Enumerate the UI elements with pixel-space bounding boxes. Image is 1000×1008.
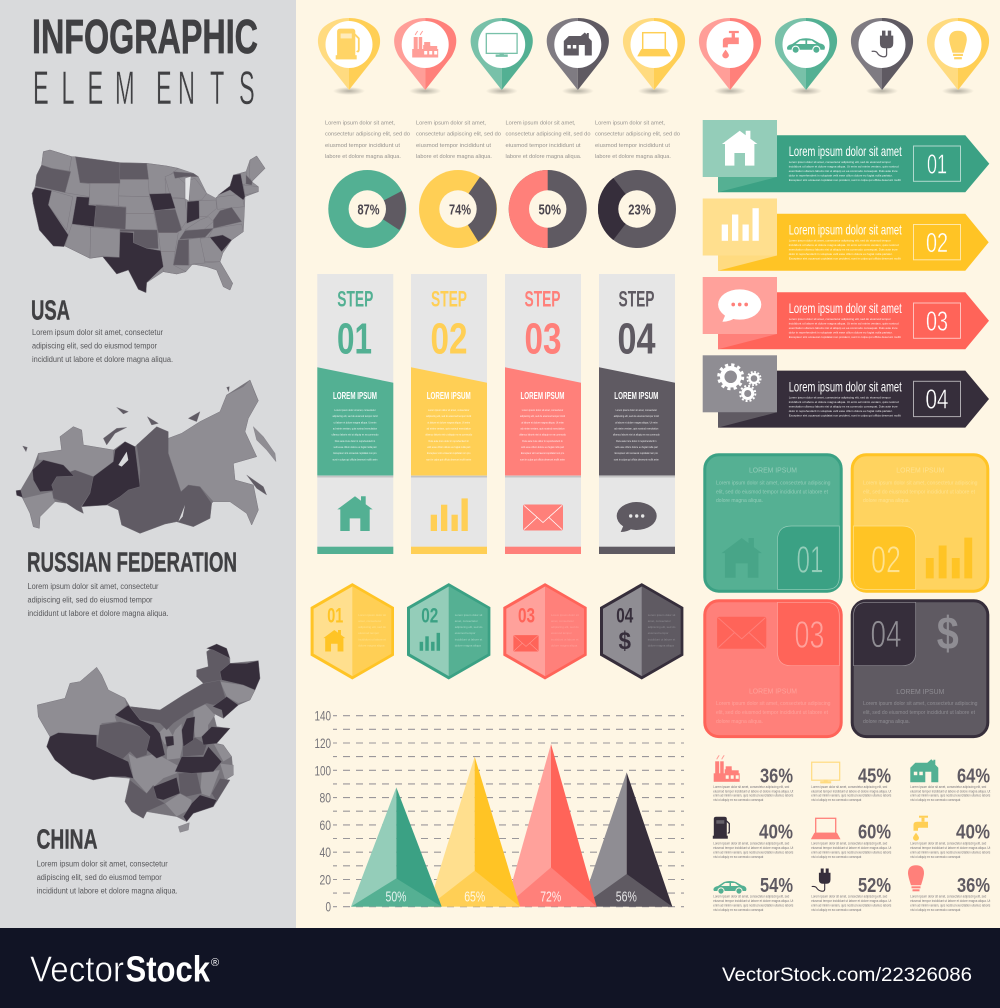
banner 03 [703,277,989,349]
banner 04: Lorem ipsum dolor sit amet, consectetur adipiscing elit, sed do eiusmod tempor [789,395,891,399]
banner 04: Excepteur sint occaecat cupidatat non proident, sunt in culpa qui officia deserunt mollit [789,413,901,417]
pin: plug [851,18,913,95]
pin: car [775,18,837,95]
stat: car 54%: nisi ut aliquip ex ea commodo consequat [713,908,763,912]
step card 02 [411,274,487,554]
banner 04: incididunt ut labore et dolore magna aliqua. Ut enim ad minim veniam, quis nostrud [789,400,899,404]
tile 04 [852,601,988,737]
text block: China description: adipiscing elit, sed do eiusmod tempor [37,873,162,882]
title [32,11,258,114]
tile 01: Lorem ipsum dolor sit amet, consectetur adipiscing [716,480,831,486]
stat: bulb 36%: enim ad minim veniam, quis nostrud exercitation ullamco laboris [910,903,991,907]
step card 03: adipiscing elit, sed do eiusmod tempor incid [520,415,566,418]
heading: Russian Federation: RUSSIAN FEDERATION [27,546,237,578]
tile 01: LOREM IPSUM [749,468,797,475]
tile 04: $ [937,607,959,659]
hexagon 04: $ [618,627,631,655]
text blocks above donuts: eiusmod tempor incididunt ut [595,143,670,149]
stat: fuel 40%: enim ad minim veniam, quis nostrud exercitation ullamco laboris [713,850,794,854]
text block: Russia description [28,582,168,618]
banner 02: Lorem ipsum dolor sit amet [789,222,902,238]
text block: Russia description: incididunt ut labore et dolore magna aliqua. [28,609,168,618]
tile 02: LOREM IPSUM [896,468,944,475]
chart axis labels: 20 [320,872,331,888]
stat: monitor 45%: 45% [858,765,891,787]
hexagon 04: eiusmod tempor [648,631,668,635]
stat: bulb 36%: nisi ut aliquip ex ea commodo consequat [910,908,960,912]
banner 01: Excepteur sint occaecat cupidatat non proident, sunt in culpa qui officia deserunt mollit [789,178,901,182]
pin row [318,18,989,95]
step card 02: Lorem ipsum dolor sit amet, consectetur [428,409,470,412]
text block: Russia description: Lorem ipsum dolor sit amet, consectetur [28,582,159,591]
pyramid: 56% [581,772,672,907]
tile 03: LOREM IPSUM [749,688,797,696]
banner 03: Excepteur sint occaecat cupidatat non proident, sunt in culpa qui officia deserunt mollit [789,335,901,339]
heading: China: CHINA [36,824,98,854]
text blocks above donuts: labore et dolore magna aliqua. [506,154,582,160]
hexagon 02: eiusmod tempor [455,631,475,635]
hexagon 01: eiusmod tempor [358,631,379,635]
step card 02: ut labore et dolore magna aliqua. Ut enim [427,421,470,424]
hexagon 02: amet, consectetur [455,619,478,623]
step card 04: ut labore et dolore magna aliqua. Ut enim [615,421,658,424]
tile 03: 03 [794,614,824,656]
donut chart: 50%: 50% [538,202,561,218]
hexagon 03 [505,585,585,678]
tile 01: elit, sed do eiusmod tempor incididunt ut labore et [716,489,828,495]
step card 02: Duis aute irure dolor in reprehenderit in [429,440,470,443]
stat: bulb 36%: 36% [957,875,990,897]
step card 01: STEP [337,287,373,312]
chart axis labels: 60 [320,817,331,833]
title: ELEMENTS [33,61,255,114]
step card 04: ad minim veniam, quis nostrud exercitation [614,428,659,430]
stat: bulb 36%: eiusmod tempor incididunt ut labore et dolore magna aliqua. Ut [910,899,990,903]
tile 02 [852,455,988,591]
stat: monitor 45%: enim ad minim veniam, quis nostrud exercitation ullamco laboris [811,794,892,798]
step card 01: ullamco laboris nisi ut aliquip ex ea commodo [332,434,379,437]
tile 03: Lorem ipsum dolor sit amet, consectetur adipiscing [716,701,831,707]
hexagon 01: adipiscing elit, sed do [358,625,386,629]
map: USA [32,150,265,293]
hexagon 04: amet, consectetur [648,619,671,623]
step card 04 [599,274,675,554]
step card 04: Duis aute irure dolor in reprehenderit in [616,440,657,443]
step card 03: velit esse cillum dolore eu fugiat nulla pari [521,446,565,449]
stat: laptop 60%: 60% [858,822,891,844]
stat: factory 36% [713,755,794,802]
text block: China description: Lorem ipsum dolor sit amet, consectetur [37,860,168,868]
footer bar [0,928,1000,1008]
chart axis labels: 0 [326,899,331,915]
footer bar: Stock [126,949,211,990]
text block: USA description [32,328,173,364]
banner 03: 03 [926,305,948,336]
hexagon 02: 02 [421,604,438,627]
banner 04: dolor in reprehenderit in voluptate velit esse cillum dolore eu fugiat nulla pariatur. [789,409,893,413]
stat: factory 36%: Lorem ipsum dolor sit amet, consectetur adipiscing elit, sed [713,785,790,789]
stat: bulb 36% [908,865,991,912]
map: Russian Federation [16,380,276,533]
chart axis labels: 120 [314,735,331,751]
footer bar: ® [211,957,219,969]
hexagon 03: 03 [518,604,535,627]
hexagon 03: amet, consectetur [551,619,574,623]
text blocks above donuts: eiusmod tempor incididunt ut [506,143,581,149]
banner 01: Lorem ipsum dolor sit amet, consectetur adipiscing elit, sed do eiusmod tempor [789,160,891,164]
pyramid value labels: 50% [386,890,407,906]
pyramid value labels: 72% [540,890,561,906]
banner 02: Lorem ipsum dolor sit amet, consectetur adipiscing elit, sed do eiusmod tempor [789,238,891,242]
pin: bulb [927,18,989,95]
step card 03: Duis aute irure dolor in reprehenderit in [522,440,563,443]
hexagon 04: dolore magna aliqua [648,643,674,647]
step card 02: ad minim veniam, quis nostrud exercitation [427,428,471,430]
stat: plug 52%: nisi ut aliquip ex ea commodo consequat [811,908,861,912]
stat: tap 40%: eiusmod tempor incididunt ut labore et dolore magna aliqua. Ut [910,846,990,850]
stat: plug 52% [811,869,892,912]
chart axis labels: 100 [314,762,331,778]
banner 03: dolor in reprehenderit in voluptate velit esse cillum dolore eu fugiat nulla pariatur. [789,330,893,334]
footer bar: VectorStock.com/22326086 [722,964,972,986]
step card 03: ad minim veniam, quis nostrud exercitation [520,428,565,430]
footer bar: Vector [30,949,124,990]
step card 04: ullamco laboris nisi ut aliquip ex ea commodo [613,434,660,437]
tile 03: elit, sed do eiusmod tempor incididunt ut labore et [716,710,828,716]
step card 03: STEP [524,287,560,312]
hexagon 03: incididunt ut labore et [551,637,579,641]
tile 04: LOREM IPSUM [896,689,944,696]
step card 04: Excepteur sint occaecat cupidatat non pro [615,452,659,455]
text blocks above donuts: consectetur adipiscing elit, sed do [325,132,410,138]
pyramid chart [314,708,684,915]
stat: car 54%: Lorem ipsum dolor sit amet, consectetur adipiscing elit, sed [713,895,790,899]
text block: Russia description: adipiscing elit, sed do eiusmod tempor [28,596,153,604]
step card 01: ad minim veniam, quis nostrud exercitation [333,428,378,430]
stat: plug 52%: eiusmod tempor incididunt ut labore et dolore magna aliqua. Ut [811,899,891,903]
stat: factory 36%: 36% [760,765,793,787]
step card 03: LOREM IPSUM [520,391,564,402]
banner 02: dolor in reprehenderit in voluptate velit esse cillum dolore eu fugiat nulla pariatur. [789,252,893,256]
step card 01: ut labore et dolore magna aliqua. Ut enim [334,421,376,424]
donut chart: 23%: 23% [628,202,651,218]
text blocks above donuts: consectetur adipiscing elit, sed do [506,132,590,138]
stat: factory 36%: nisi ut aliquip ex ea commodo consequat [713,798,763,802]
hexagon 04: Lorem ipsum dolor sit [648,613,676,617]
hexagon 02: dolore magna aliqua [455,643,481,647]
banner 04: Lorem ipsum dolor sit amet [789,378,902,394]
stat: plug 52%: Lorem ipsum dolor sit amet, consectetur adipiscing elit, sed [811,895,888,899]
hexagon 02 [408,585,489,678]
tile 02: 02 [871,540,901,582]
pyramid: 50% [351,787,442,907]
stat: fuel 40%: eiusmod tempor incididunt ut labore et dolore magna aliqua. Ut [713,846,793,850]
hexagon 03: dolore magna aliqua [551,643,578,647]
map: China [37,644,260,832]
stat: fuel 40% [713,817,794,859]
chart axis labels: 40 [320,844,331,860]
tile 04: elit, sed do eiusmod tempor incididunt ut labore et [863,710,975,716]
tile 03 [705,601,841,737]
pin: laptop [623,18,685,95]
step card 02: Excepteur sint occaecat cupidatat non pro [427,452,471,455]
hexagon 04: 04 [616,604,633,627]
text blocks above donuts: labore et dolore magna aliqua. [325,154,401,160]
stat: house 64% [910,759,991,802]
stat: house 64%: eiusmod tempor incididunt ut labore et dolore magna aliqua. Ut [910,789,990,793]
text blocks above donuts: Lorem ipsum dolor sit amet, [325,120,395,126]
banner 01: Lorem ipsum dolor sit amet [789,143,902,159]
tile 01: 01 [796,540,824,582]
banner 02 [703,198,989,271]
hexagon 01 [312,585,392,678]
hexagon 01: Lorem ipsum dolor sit [358,613,386,617]
text blocks above donuts: Lorem ipsum dolor sit amet, [506,120,576,126]
banner 01: dolor in reprehenderit in voluptate velit esse cillum dolore eu fugiat nulla pariatur. [789,174,893,178]
hexagon 03: eiusmod tempor [551,631,572,635]
step card 03: sunt in culpa qui officia deserunt mollit anim [520,458,565,461]
stat: car 54%: enim ad minim veniam, quis nostrud exercitation ullamco laboris [713,903,794,907]
step card 01: sunt in culpa qui officia deserunt mollit anim [332,458,378,461]
text block: China description [37,860,178,896]
tile 02: Lorem ipsum dolor sit amet, consectetur adipiscing [863,480,978,486]
chart axis labels: 140 [314,708,331,724]
banner 03: Lorem ipsum dolor sit amet, consectetur adipiscing elit, sed do eiusmod tempor [789,317,891,321]
step card 02: adipiscing elit, sed do eiusmod tempor incid [426,415,472,418]
step card 03: ullamco laboris nisi ut aliquip ex ea commodo [519,434,567,437]
donut chart: 23% [598,170,676,248]
stat: monitor 45%: Lorem ipsum dolor sit amet, consectetur adipiscing elit, sed [811,785,888,789]
text block: USA description: adipiscing elit, sed do eiusmod tempor [32,342,157,350]
stat: bulb 36%: Lorem ipsum dolor sit amet, consectetur adipiscing elit, sed [910,895,987,899]
text blocks above donuts: eiusmod tempor incididunt ut [325,143,400,149]
banner 04: exercitation ullamco laboris nisi ut aliquip ex ea commodo consequat. Duis aute irure [789,404,898,408]
text block: China description: incididunt ut labore et dolore magna aliqua. [37,886,178,896]
stat: tap 40%: 40% [956,822,990,844]
tile 02: dolore magna aliqua. [863,498,910,504]
step card 01: LOREM IPSUM [333,391,377,402]
hexagon 01: 01 [327,604,344,627]
step card 01: velit esse cillum dolore eu fugiat nulla pari [333,446,377,449]
step card 04: sunt in culpa qui officia deserunt mollit anim [614,458,659,461]
pyramid: 72% [505,744,597,907]
stat: tap 40%: enim ad minim veniam, quis nostrud exercitation ullamco laboris [910,850,991,854]
stat: fuel 40%: Lorem ipsum dolor sit amet, consectetur adipiscing elit, sed [713,842,790,846]
step card 04: 04 [618,314,656,363]
step card 02: 02 [430,314,468,363]
donut chart: 87%: 87% [358,202,380,218]
pyramid value labels: 65% [464,890,485,906]
banner 02: incididunt ut labore et dolore magna aliqua. Ut enim ad minim veniam, quis nostrud [789,243,899,247]
text blocks above donuts [325,120,680,160]
stat: laptop 60%: enim ad minim veniam, quis nostrud exercitation ullamco laboris [811,850,892,854]
pyramid value labels [386,890,637,906]
hexagon 04: incididunt ut labore et [648,637,675,641]
stat: car 54% [713,875,794,912]
banner 02: Excepteur sint occaecat cupidatat non proident, sunt in culpa qui officia deserunt mollit [789,256,901,260]
stat: plug 52%: 52% [858,875,891,897]
text blocks above donuts: consectetur adipiscing elit, sed do [595,132,680,138]
step card 04: adipiscing elit, sed do eiusmod tempor incid [614,415,660,418]
banner 04 [703,355,989,428]
step card 04: STEP [618,287,654,312]
step card 02: STEP [431,287,467,312]
step card 03: 03 [524,314,562,363]
donut chart: 50% [509,170,587,248]
tile 03: dolore magna aliqua. [716,719,763,725]
hexagon 02: adipiscing elit, sed do [455,625,483,629]
chart axis labels: 80 [320,790,331,806]
hexagon 04: adipiscing elit, sed do [648,625,676,629]
step card 02: sunt in culpa qui officia deserunt mollit anim [426,458,471,461]
pin: tap [699,18,761,95]
stat: fuel 40%: 40% [759,822,793,844]
hexagon 03: adipiscing elit, sed do [551,625,579,629]
stat: monitor 45%: eiusmod tempor incididunt ut labore et dolore magna aliqua. Ut [811,789,891,793]
stat: laptop 60%: nisi ut aliquip ex ea commodo consequat [811,855,861,859]
step card 04: Lorem ipsum dolor sit amet, consectetur [616,409,657,412]
step card 03: Lorem ipsum dolor sit amet, consectetur [522,409,563,412]
panel: country maps sidebar [0,0,296,928]
text blocks above donuts: consectetur adipiscing elit, sed do [416,132,501,138]
stat: house 64%: enim ad minim veniam, quis nostrud exercitation ullamco laboris [910,794,991,798]
banner 01: 01 [927,148,947,179]
title: INFOGRAPHIC [32,11,258,64]
heading: USA: USA [31,294,70,326]
tile 04: Lorem ipsum dolor sit amet, consectetur adipiscing [863,701,978,707]
stat: laptop 60%: eiusmod tempor incididunt ut labore et dolore magna aliqua. Ut [811,846,891,850]
stat: monitor 45%: nisi ut aliquip ex ea commodo consequat [811,798,861,802]
tile 01: dolore magna aliqua. [716,498,763,504]
hexagon 02: Lorem ipsum dolor sit [455,613,483,617]
banner 04: 04 [926,384,948,415]
step card 01: Lorem ipsum dolor sit amet, consectetur [334,409,376,412]
donut chart: 74%: 74% [449,202,471,218]
step card 02: LOREM IPSUM [427,391,471,402]
banner 02: exercitation ullamco laboris nisi ut aliquip ex ea commodo consequat. Duis aute irure [789,248,898,252]
stat: car 54%: 54% [760,875,793,897]
text blocks above donuts: labore et dolore magna aliqua. [416,154,492,160]
text blocks above donuts: labore et dolore magna aliqua. [595,154,671,160]
pin: fuel [318,18,380,95]
tile 04: 04 [870,614,902,656]
banner 01: incididunt ut labore et dolore magna aliqua. Ut enim ad minim veniam, quis nostrud [789,164,899,168]
stat: car 54%: eiusmod tempor incididunt ut labore et dolore magna aliqua. Ut [713,899,793,903]
hexagon 01: incididunt ut labore et [358,637,386,641]
step card 01: 01 [337,314,372,363]
text blocks above donuts: eiusmod tempor incididunt ut [416,143,491,149]
stat: monitor 45% [811,762,892,802]
stat: laptop 60%: Lorem ipsum dolor sit amet, consectetur adipiscing elit, sed [811,842,888,846]
stat: house 64%: Lorem ipsum dolor sit amet, consectetur adipiscing elit, sed [910,785,987,789]
step card 04: LOREM IPSUM [614,391,658,402]
step card 01: adipiscing elit, sed do eiusmod tempor incid [332,415,378,418]
pyramid: 65% [428,757,520,907]
chart axis labels [314,708,331,915]
stat: plug 52%: enim ad minim veniam, quis nostrud exercitation ullamco laboris [811,903,892,907]
stat: tap 40%: Lorem ipsum dolor sit amet, consectetur adipiscing elit, sed [910,842,987,846]
donut chart: 74% [419,170,497,248]
tile 04: dolore magna aliqua. [863,719,910,725]
pyramid value labels: 56% [616,890,637,906]
banner 02: 02 [926,227,948,258]
hexagon 01: dolore magna aliqua [358,643,385,647]
chart grid [333,716,684,907]
banner 01: exercitation ullamco laboris nisi ut aliquip ex ea commodo consequat. Duis aute irure [789,169,898,173]
pin: monitor [471,18,533,95]
donut chart: 87% [328,170,406,248]
hexagon 02: incididunt ut labore et [455,637,482,641]
pin: house [547,18,609,95]
text block: USA description: Lorem ipsum dolor sit amet, consectetur [32,328,163,337]
stat: house 64%: 64% [957,765,990,787]
step card 01: Excepteur sint occaecat cupidatat non pro [333,452,377,455]
stat: house 64%: nisi ut aliquip ex ea commodo consequat [910,798,960,802]
banner 03: exercitation ullamco laboris nisi ut aliquip ex ea commodo consequat. Duis aute irure [789,326,898,330]
hexagon 01: amet, consectetur [358,619,381,623]
banner 03: incididunt ut labore et dolore magna aliqua. Ut enim ad minim veniam, quis nostrud [789,322,899,326]
step card 02: velit esse cillum dolore eu fugiat nulla pari [427,446,471,449]
stat: factory 36%: eiusmod tempor incididunt ut labore et dolore magna aliqua. Ut [713,789,793,793]
stat: tap 40%: nisi ut aliquip ex ea commodo consequat [910,855,960,859]
step card 04: velit esse cillum dolore eu fugiat nulla pari [615,446,658,449]
stat: factory 36%: enim ad minim veniam, quis nostrud exercitation ullamco laboris [713,794,794,798]
step card 01 [317,274,393,554]
stat: fuel 40%: nisi ut aliquip ex ea commodo consequat [713,855,763,859]
step card 03: Excepteur sint occaecat cupidatat non pro [521,452,565,455]
tile 02: elit, sed do eiusmod tempor incididunt ut labore et [863,489,975,495]
banner 01 [703,120,989,192]
stat: tap 40% [910,816,991,859]
pin: factory [394,18,456,95]
text blocks above donuts: Lorem ipsum dolor sit amet, [595,120,665,126]
tile 01 [705,455,841,591]
step card 02: ullamco laboris nisi ut aliquip ex ea commodo [425,434,473,437]
text block: USA description: incididunt ut labore et dolore magna aliqua. [32,355,173,364]
banner 03: Lorem ipsum dolor sit amet [789,300,902,316]
step card 03: ut labore et dolore magna aliqua. Ut enim [521,421,564,424]
hexagon 03: Lorem ipsum dolor sit [551,613,579,617]
text blocks above donuts: Lorem ipsum dolor sit amet, [416,120,486,126]
step card 03 [505,274,581,554]
step card 01: Duis aute irure dolor in reprehenderit in [335,440,376,443]
stat: laptop 60% [811,818,892,859]
hexagon 04 [602,585,682,678]
